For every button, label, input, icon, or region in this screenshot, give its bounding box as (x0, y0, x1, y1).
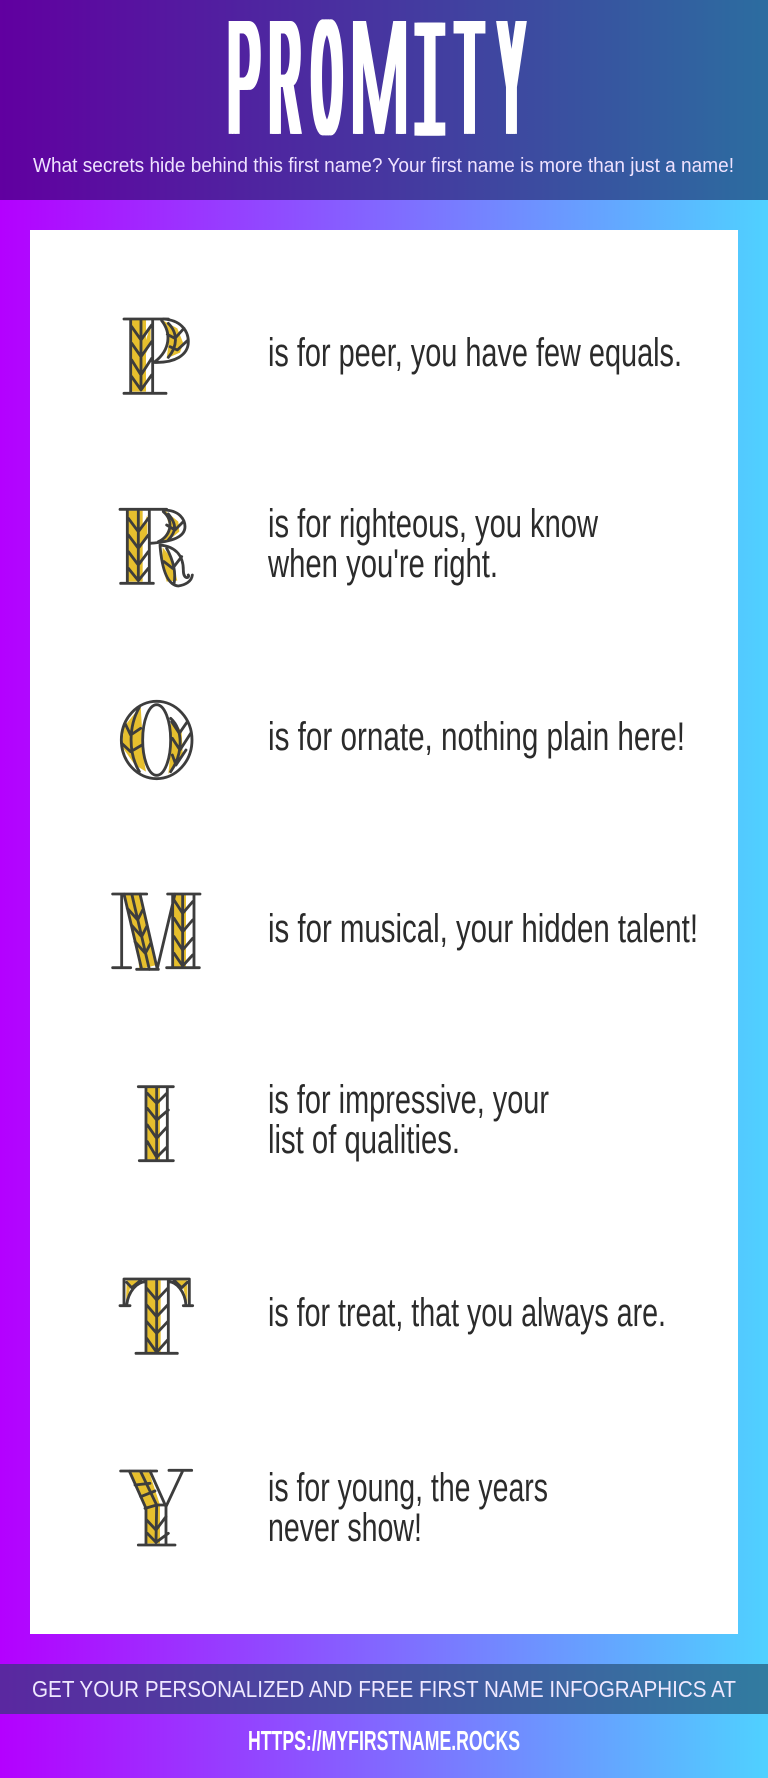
title: PROMITY: I (411, 0, 449, 188)
text: I lines: list of qualities. (268, 1118, 460, 1162)
text: R lines: is for righteous, you know (268, 502, 598, 546)
icon: letter P (124, 319, 188, 393)
row M (113, 894, 698, 969)
row R (120, 502, 598, 586)
text: I lines: is for impressive, your (268, 1078, 549, 1122)
row T (120, 1279, 666, 1353)
footer url: HTTPS://MYFIRSTNAME.ROCKS (248, 1725, 520, 1756)
row I (138, 1078, 549, 1162)
text: I lines (268, 1078, 549, 1162)
row O (121, 701, 685, 779)
subtitle: What secrets hide behind this first name? Your first name is more than just a name! (33, 155, 734, 177)
text: R lines (267, 502, 598, 586)
text: Y lines: is for young, the years (268, 1466, 548, 1510)
title: PROMITY (228, 0, 527, 188)
text: R lines: when you're right. (267, 542, 498, 586)
header band (0, 0, 768, 200)
icon: letter Y (121, 1470, 192, 1545)
icon: letter T (120, 1279, 193, 1353)
icon: letter O (121, 701, 192, 779)
footer band (0, 1664, 768, 1714)
row P (124, 319, 682, 393)
icon: letter M (113, 894, 200, 969)
text: Y lines: never show! (268, 1506, 422, 1550)
white card panel (30, 230, 738, 1634)
row Y (121, 1466, 548, 1550)
icon: letter I (138, 1087, 173, 1161)
icon: letter R (120, 509, 192, 586)
text: Y lines (268, 1466, 548, 1550)
